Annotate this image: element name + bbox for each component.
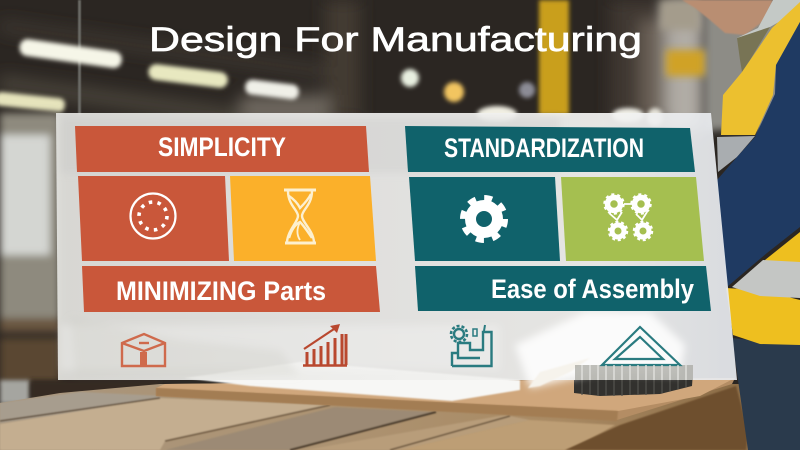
- icon: box: [122, 334, 165, 366]
- simplicity header: SIMPLICITY: [158, 132, 286, 162]
- minimizing parts bar: [82, 266, 380, 312]
- gear part ribs: [582, 365, 686, 380]
- icon: dotted circle: [130, 194, 176, 238]
- standardization header: STANDARDIZATION: [444, 133, 644, 163]
- panel: standardization: [405, 126, 711, 311]
- upper vest: [721, 2, 800, 135]
- standardization header: [405, 126, 695, 172]
- simplicity header: [75, 126, 369, 172]
- reflective strip lower: [732, 260, 800, 298]
- orange cell: [78, 176, 229, 261]
- panel: simplicity: [75, 126, 380, 312]
- table edge: [565, 386, 748, 450]
- green cell: [561, 177, 704, 261]
- gear part on table: [574, 372, 693, 396]
- glove cuff: [528, 358, 590, 388]
- reflective strip upper: [717, 136, 755, 172]
- worker: [682, 0, 800, 450]
- lower vest: [726, 288, 800, 345]
- icon: gear: [463, 198, 505, 240]
- icon: triangle ruler: [602, 327, 680, 365]
- blurred highlights: [60, 118, 685, 388]
- icon: rising bar chart: [303, 324, 347, 366]
- ease of assembly bar: Ease of Assembly: [491, 274, 694, 304]
- icon: linked gears: [604, 194, 652, 240]
- minimizing parts bar: MINIMIZING Parts: [116, 276, 326, 306]
- teal cell: [409, 177, 560, 261]
- icon: process gear and stairs: [451, 325, 492, 366]
- table top: [0, 384, 750, 450]
- machine part ghost: [575, 365, 693, 380]
- wooden board with plans: [156, 362, 735, 421]
- jeans: [732, 338, 800, 450]
- yellow cell: [230, 176, 376, 261]
- face: [682, 0, 773, 35]
- ease of assembly bar: [415, 266, 711, 311]
- left machinery: [0, 113, 60, 383]
- icon: hourglass: [284, 190, 316, 243]
- title: Design For Manufacturing: [149, 21, 642, 59]
- navy sleeve: [717, 22, 800, 287]
- collar: [737, 0, 800, 50]
- translucent panel: [56, 113, 737, 388]
